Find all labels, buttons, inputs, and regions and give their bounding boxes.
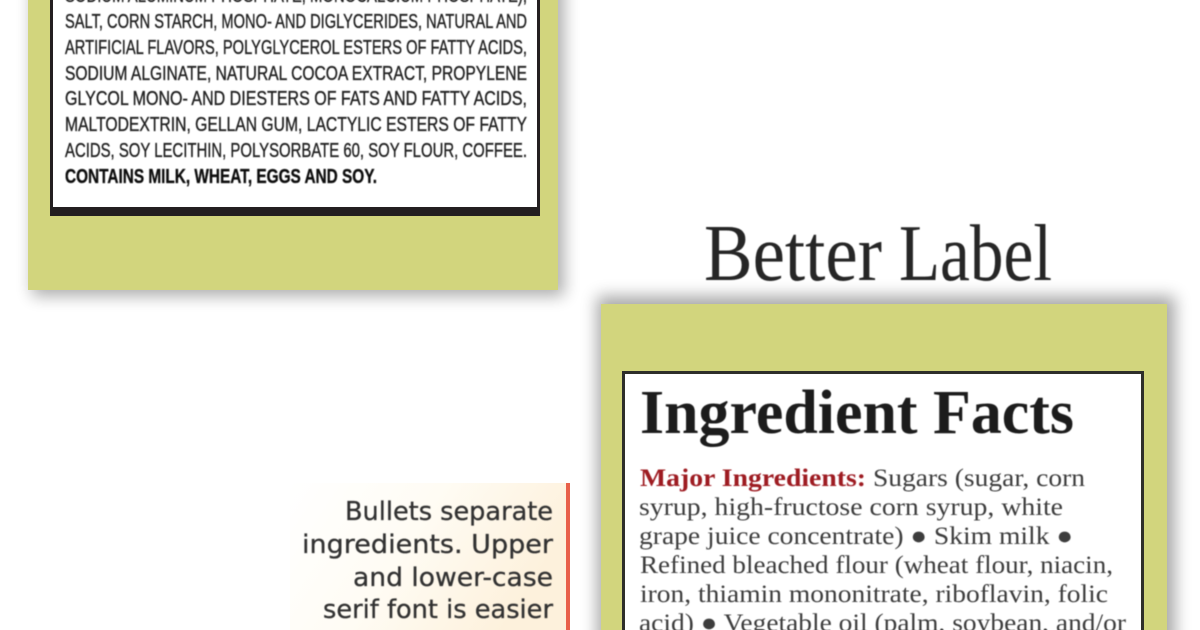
heading: Better Label: Better xyxy=(704,210,882,298)
callout text: ingredients. Upper xyxy=(302,530,553,560)
text block: all-caps ingredient list: SALT, CORN STARCH, MONO- AND DIGLYCERIDES, NATURAL AND xyxy=(65,11,527,33)
callout text xyxy=(302,497,553,625)
text block: all-caps ingredient list: CONTAINS MILK, WHEAT, EGGS AND SOY. xyxy=(65,166,377,188)
text block: ingredient list: Refined bleached flour (wheat flour, niacin, xyxy=(640,552,1113,579)
text block: all-caps ingredient list: GLYCOL MONO- AND DIESTERS OF FATS AND FATTY ACIDS, xyxy=(65,88,527,110)
heading: Better Label xyxy=(704,210,1052,298)
callout text: Bullets separate xyxy=(345,497,553,527)
label box: current ingredients xyxy=(50,0,540,216)
text block: all-caps ingredient list xyxy=(65,0,527,188)
text block: ingredient list xyxy=(639,465,1127,630)
text block: ingredient list: syrup, high-fructose corn syrup, white xyxy=(639,494,1063,521)
callout text: and lower-case xyxy=(353,563,553,593)
text block: all-caps ingredient list: ACIDS, SOY LECITHIN, POLYSORBATE 60, SOY FLOUR, COFFEE. xyxy=(65,140,527,162)
callout text: serif font is easier xyxy=(323,595,553,625)
label box: ingredient facts xyxy=(622,371,1144,630)
label title: Ingredient Facts: Ingredient Facts xyxy=(640,379,1074,447)
text block: ingredient list: grape juice concentrate) ● Skim milk ● xyxy=(639,523,1073,550)
text block: ingredient list: Major Ingredients: xyxy=(640,465,866,492)
panel: current label xyxy=(28,0,564,296)
callout: bullets separate ingredients xyxy=(290,483,570,630)
text block: all-caps ingredient list: SODIUM ALGINATE, NATURAL COCOA EXTRACT, PROPYLENE xyxy=(65,63,527,85)
text block: ingredient list: iron, thiamin mononitrate, riboflavin, folic xyxy=(640,581,1108,608)
heading: Better Label: Label xyxy=(899,210,1052,298)
text block: all-caps ingredient list: MALTODEXTRIN, GELLAN GUM, LACTYLIC ESTERS OF FATTY xyxy=(65,114,527,136)
text block: ingredient list: Sugars (sugar, corn xyxy=(873,465,1086,492)
text block: all-caps ingredient list: ARTIFICIAL FLAVORS, POLYGLYCEROL ESTERS OF FATTY ACIDS, xyxy=(65,37,527,59)
panel: better label xyxy=(597,296,1175,630)
